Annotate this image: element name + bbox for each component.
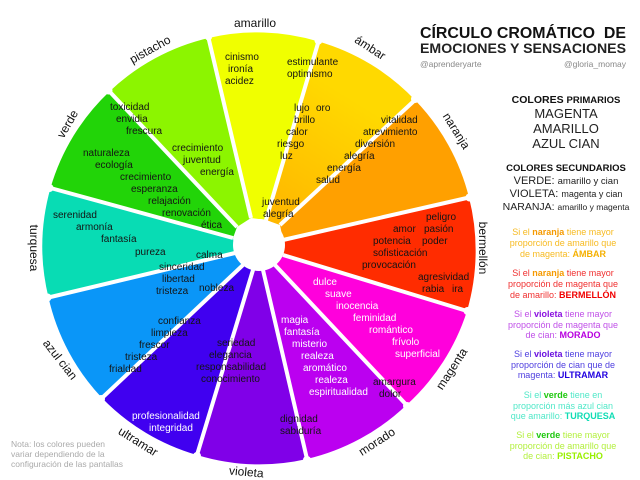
words: ultramar: integridad bbox=[149, 423, 193, 434]
secondary colours block: NARANJA: amarillo y magenta bbox=[503, 201, 630, 213]
footnote: variar dependiendo de la bbox=[11, 449, 105, 459]
words: bermellon: sofisticación bbox=[373, 248, 427, 259]
title bbox=[420, 23, 626, 56]
note: bermellon bbox=[508, 268, 618, 300]
words: amarillo and ambar: ironía bbox=[228, 64, 253, 75]
words: naranja bbox=[316, 115, 418, 186]
social handles: @aprenderyarte bbox=[420, 59, 482, 69]
words: verde and pistacho: frescura bbox=[126, 126, 163, 137]
words: amarillo and ambar bbox=[225, 52, 339, 220]
wedge: violeta bbox=[197, 270, 307, 464]
wedge: pistacho bbox=[110, 38, 251, 227]
wedge: ultramar bbox=[102, 265, 253, 455]
words: bermellon bbox=[362, 212, 469, 295]
words: morado: fantasía bbox=[284, 327, 320, 338]
words: azul cian: frescor bbox=[139, 340, 170, 351]
words: amarillo and ambar: brillo bbox=[294, 115, 316, 126]
words: bermellon: poder bbox=[422, 236, 448, 247]
colour name labels around wheel bbox=[27, 16, 490, 480]
secondary colours block: VERDE: amarillo y cian bbox=[514, 175, 618, 187]
words: morado: realeza bbox=[315, 375, 348, 386]
colour name labels around wheel: morado bbox=[356, 425, 398, 459]
words: morado: misterio bbox=[292, 339, 327, 350]
words: amargura, dignidad: dolor bbox=[379, 389, 402, 400]
note: morado: proporción de magenta que bbox=[508, 320, 618, 330]
primary colours block: AZUL CIAN bbox=[532, 136, 600, 151]
words: magenta: feminidad bbox=[353, 313, 396, 324]
colour name labels around wheel: naranja bbox=[440, 110, 473, 152]
words: azul cian: limpieza bbox=[151, 328, 188, 339]
words: magenta: dulce bbox=[313, 277, 337, 288]
words: bermellon: rabia bbox=[422, 284, 445, 295]
note: pistacho: de cian: PISTACHO bbox=[523, 451, 603, 461]
words: naranja: salud bbox=[316, 175, 340, 186]
words: magenta bbox=[313, 277, 440, 360]
note: morado bbox=[508, 309, 618, 340]
words: amarillo and ambar: estimulante bbox=[287, 57, 339, 68]
words: verde and pistacho: esperanza bbox=[131, 184, 178, 195]
social handles: @gloria_momay bbox=[564, 59, 627, 69]
words: amargura, dignidad: sabiduría bbox=[280, 426, 322, 437]
words: azul cian: libertad bbox=[162, 274, 195, 285]
primary colours block bbox=[512, 94, 620, 151]
words: amarillo and ambar: luz bbox=[280, 151, 293, 162]
words: morado: realeza bbox=[301, 351, 334, 362]
wedge: turquesa bbox=[42, 188, 235, 298]
title: CÍRCULO CROMÁTICO DE bbox=[420, 23, 626, 42]
words: amarillo and ambar: lujo bbox=[294, 103, 310, 114]
note: ultramar bbox=[511, 349, 615, 380]
colour name labels around wheel: pistacho bbox=[127, 32, 173, 66]
words: magenta: superficial bbox=[395, 349, 440, 360]
footnote: configuración de las pantallas bbox=[11, 459, 123, 469]
words: morado: espiritualidad bbox=[309, 387, 368, 398]
wedge: morado bbox=[263, 265, 406, 459]
wedge: verde bbox=[50, 92, 237, 238]
wedge: ambar bbox=[266, 42, 415, 225]
words: violeta and ultramar: responsabilidad bbox=[196, 362, 266, 373]
words: amargura, dignidad: dignidad bbox=[280, 414, 318, 425]
words: naranja: alegría bbox=[344, 151, 375, 162]
primary colours block: MAGENTA bbox=[534, 106, 598, 121]
emotions: dark words bbox=[53, 52, 469, 437]
note: ultramar: proporción de cian que de bbox=[511, 360, 615, 370]
colour name labels around wheel: azul cian bbox=[40, 337, 80, 383]
words: ultramar bbox=[132, 411, 200, 434]
words: verde and pistacho: ecología bbox=[95, 160, 133, 171]
words: turquesa: calma bbox=[196, 250, 223, 261]
colour wheel wedges bbox=[42, 32, 476, 464]
words: violeta and ultramar bbox=[196, 283, 266, 385]
words: verde and pistacho bbox=[83, 102, 234, 231]
words: ultramar: profesionalidad bbox=[132, 411, 200, 422]
words: verde and pistacho: energía bbox=[200, 167, 234, 178]
note: ambar: de magenta: ÁMBAR bbox=[520, 249, 607, 259]
words: amarillo and ambar: acidez bbox=[225, 76, 254, 87]
words: bermellon: peligro bbox=[426, 212, 456, 223]
words: azul cian bbox=[109, 262, 205, 375]
words: azul cian: frialdad bbox=[109, 364, 142, 375]
secondary colours block: COLORES SECUNDARIOS bbox=[506, 163, 626, 174]
wedge: azul cian bbox=[48, 253, 243, 398]
note: turquesa bbox=[511, 390, 616, 421]
words: violeta and ultramar: nobleza bbox=[199, 283, 234, 294]
note: bermellon: proporción de magenta que bbox=[508, 279, 618, 289]
words: magenta: inocencia bbox=[336, 301, 379, 312]
words: turquesa: armonía bbox=[76, 222, 113, 233]
words: amarillo and ambar: alegría bbox=[263, 209, 294, 220]
words: violeta and ultramar: seriedad bbox=[217, 338, 255, 349]
wedge: bermellon bbox=[283, 198, 476, 311]
words: azul cian: tristeza bbox=[156, 286, 189, 297]
note: bermellon: de amarillo: BERMELLÓN bbox=[510, 289, 616, 300]
note: pistacho bbox=[510, 430, 616, 461]
words: verde and pistacho: renovación bbox=[162, 208, 211, 219]
words: turquesa: fantasía bbox=[101, 234, 137, 245]
colour name labels around wheel: magenta bbox=[433, 345, 470, 392]
colour name labels around wheel: violeta bbox=[228, 464, 265, 480]
words: amargura, dignidad bbox=[280, 377, 416, 437]
words: amarillo and ambar: oro bbox=[316, 103, 331, 114]
words: magenta: suave bbox=[325, 289, 352, 300]
colour name labels around wheel: amarillo bbox=[234, 16, 276, 30]
note: morado: de cian: MORADO bbox=[525, 330, 601, 340]
words: bermellon: ira bbox=[452, 284, 464, 295]
words: verde and pistacho: crecimiento bbox=[120, 172, 172, 183]
primary colours block: COLORES PRIMARIOS bbox=[512, 94, 620, 106]
words: naranja: energía bbox=[327, 163, 361, 174]
note: turquesa: Si el verde tiene en bbox=[524, 390, 602, 400]
words: amarillo and ambar: juventud bbox=[261, 197, 300, 208]
colour name labels around wheel: ámbar bbox=[352, 33, 388, 63]
note: morado: Si el violeta tiene mayor bbox=[514, 309, 612, 319]
words: verde and pistacho: crecimiento bbox=[172, 143, 224, 154]
words: magenta: frívolo bbox=[392, 337, 420, 348]
words: azul cian: sinceridad bbox=[159, 262, 205, 273]
words: azul cian: confianza bbox=[158, 316, 201, 327]
secondary colours block bbox=[503, 163, 630, 213]
words: verde and pistacho: envidia bbox=[116, 114, 148, 125]
words: amargura, dignidad: amargura bbox=[373, 377, 416, 388]
title: EMOCIONES Y SENSACIONES bbox=[420, 40, 626, 56]
words: bermellon: provocación bbox=[362, 260, 416, 271]
words: turquesa bbox=[53, 210, 223, 261]
words: verde and pistacho: ética bbox=[201, 220, 223, 231]
footnote: Nota: los colores pueden bbox=[11, 439, 105, 449]
words: magenta: romántico bbox=[369, 325, 413, 336]
secondary colours block: VIOLETA: magenta y cian bbox=[510, 188, 622, 200]
colour name labels around wheel: verde bbox=[54, 107, 81, 141]
words: bermellon: potencia bbox=[373, 236, 411, 247]
words: amarillo and ambar: calor bbox=[286, 127, 308, 138]
wedge: amarillo bbox=[208, 32, 318, 220]
words: violeta and ultramar: conocimiento bbox=[201, 374, 260, 385]
words: amarillo and ambar: optimismo bbox=[287, 69, 333, 80]
note: ambar bbox=[510, 227, 616, 259]
note: turquesa: que amarillo: TURQUESA bbox=[511, 411, 616, 421]
emotions: white words bbox=[132, 277, 440, 434]
note: pistacho: proporción de amarillo que bbox=[510, 441, 616, 451]
words: turquesa: serenidad bbox=[53, 210, 97, 221]
words: azul cian: tristeza bbox=[125, 352, 158, 363]
colour name labels around wheel: turquesa bbox=[27, 225, 41, 272]
words: amarillo and ambar: riesgo bbox=[277, 139, 305, 150]
words: turquesa: pureza bbox=[135, 247, 166, 258]
footnote bbox=[11, 439, 123, 469]
note: ambar: Si el naranja tiene mayor bbox=[512, 227, 614, 237]
words: morado bbox=[281, 315, 368, 398]
note: turquesa: proporción más azul cian bbox=[513, 401, 613, 411]
words: naranja: diversión bbox=[355, 139, 395, 150]
colour name labels around wheel: bermellón bbox=[476, 222, 490, 274]
words: morado: aromático bbox=[303, 363, 347, 374]
words: verde and pistacho: naturaleza bbox=[83, 148, 130, 159]
centre circle bbox=[233, 219, 285, 271]
primary colours block: AMARILLO bbox=[533, 121, 599, 136]
wedge: naranja bbox=[280, 100, 469, 240]
note: bermellon: Si el naranja tiene mayor bbox=[512, 268, 614, 278]
words: bermellon: pasión bbox=[424, 224, 453, 235]
note: ultramar: magenta: ULTRAMAR bbox=[518, 370, 609, 380]
words: verde and pistacho: juventud bbox=[182, 155, 221, 166]
words: violeta and ultramar: elegancia bbox=[209, 350, 252, 361]
note: ultramar: Si el violeta tiene mayor bbox=[514, 349, 612, 359]
words: verde and pistacho: relajación bbox=[148, 196, 191, 207]
words: morado: magia bbox=[281, 315, 309, 326]
words: naranja: atrevimiento bbox=[363, 127, 418, 138]
note: pistacho: Si el verde tiene mayor bbox=[516, 430, 610, 440]
words: verde and pistacho: toxicidad bbox=[110, 102, 149, 113]
colour name labels around wheel: ultramar bbox=[116, 424, 160, 459]
social handles bbox=[420, 59, 627, 69]
wedge: magenta bbox=[275, 255, 467, 405]
words: naranja: vitalidad bbox=[381, 115, 418, 126]
words: amarillo and ambar: cinismo bbox=[225, 52, 259, 63]
words: bermellon: amor bbox=[393, 224, 416, 235]
note: ambar: proporción de amarillo que bbox=[510, 238, 616, 248]
words: bermellon: agresividad bbox=[418, 272, 469, 283]
